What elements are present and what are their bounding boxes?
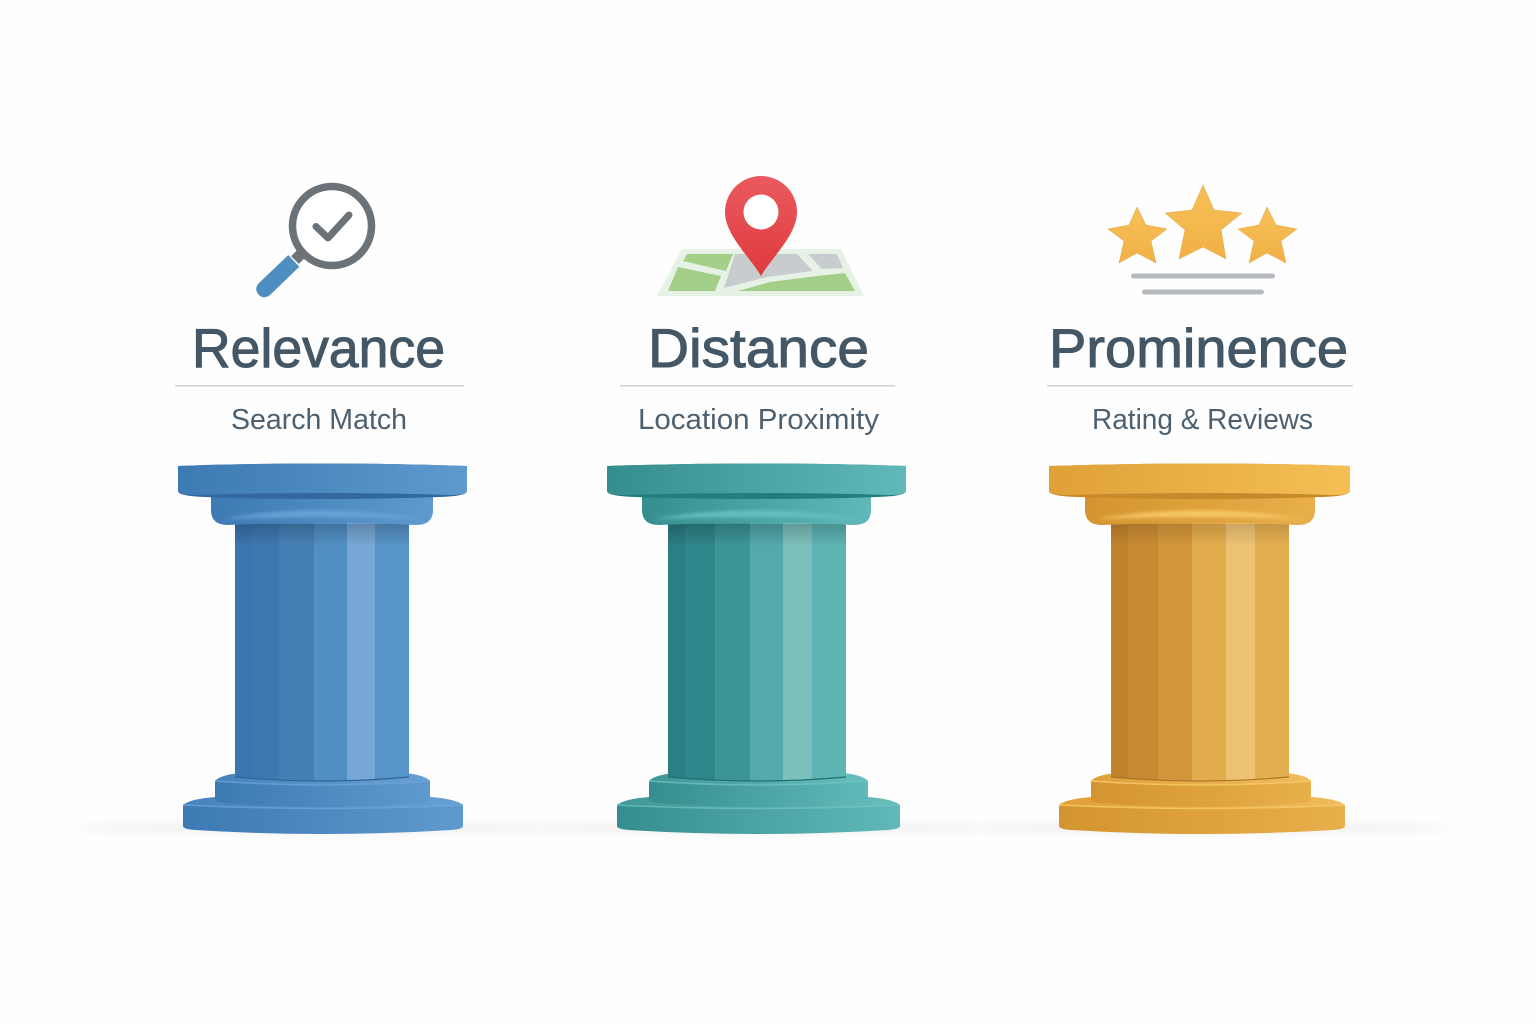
panel: prominence [1047, 185, 1353, 834]
heading: Relevance: Relevance [192, 317, 445, 379]
pillar: gold column [1049, 464, 1350, 834]
subtitle: Rating & Reviews: Rating & Reviews [1092, 404, 1313, 436]
icon: three stars with rating lines [1108, 185, 1297, 294]
subtitle: Location Proximity: Location Proximity [638, 404, 879, 436]
panel: relevance [175, 186, 467, 834]
icon: map with location pin [657, 176, 864, 296]
pillar: blue column [178, 464, 467, 834]
heading: Distance: Distance [648, 317, 869, 379]
icon: magnifying glass with check [256, 186, 372, 297]
pillar: teal column [607, 464, 906, 834]
subtitle: Search Match: Search Match [231, 404, 407, 436]
ground shadow [72, 824, 1452, 832]
panel: distance [607, 176, 906, 834]
heading: Prominence: Prominence [1049, 317, 1348, 379]
